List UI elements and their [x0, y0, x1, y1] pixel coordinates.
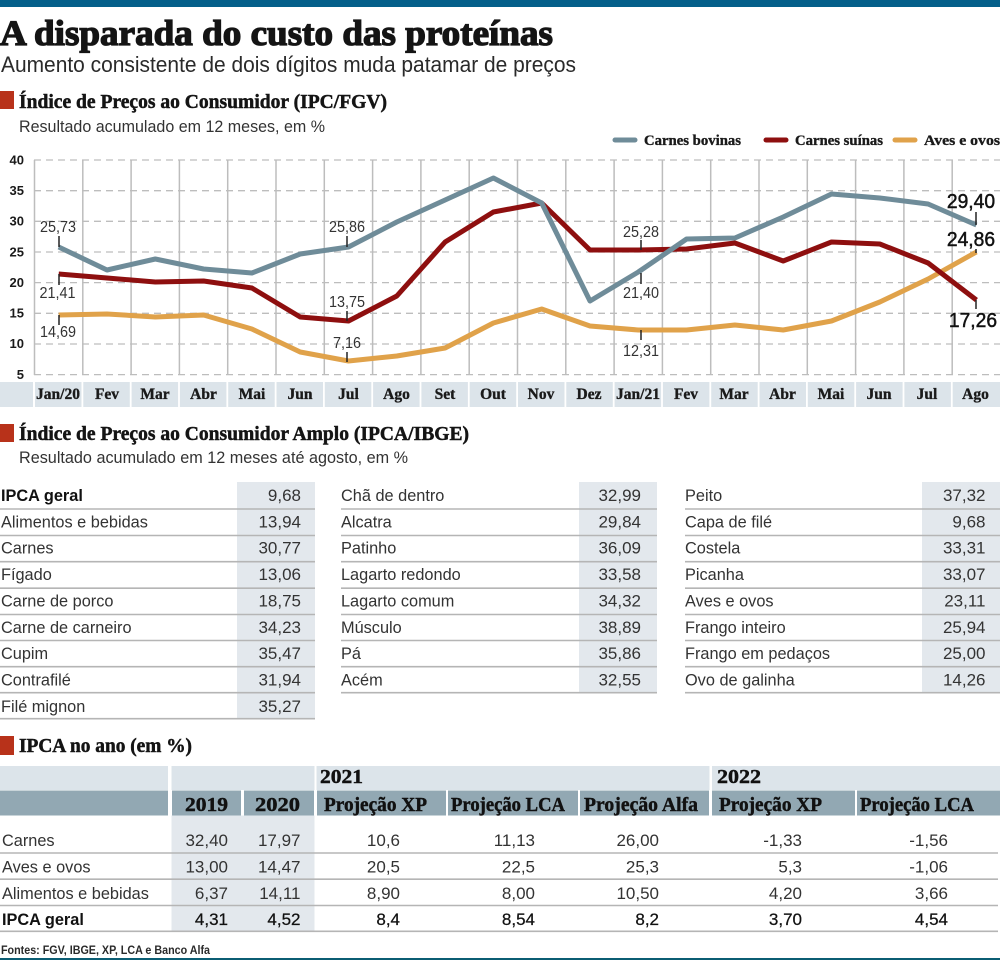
table header: 2021 [320, 766, 363, 788]
table rows: 11,13 [494, 831, 535, 850]
month axis [0, 382, 1000, 407]
table: column 1: 35,47 [258, 644, 301, 663]
legend [615, 133, 1000, 149]
table: column 1: 18,75 [258, 591, 301, 610]
table rows: 8,4 [376, 910, 400, 929]
month axis: Abr [769, 386, 796, 403]
subheading: IPC/FGV: Resultado acumulado em 12 meses, em % [19, 118, 325, 136]
month axis: Nov [528, 386, 555, 403]
series: Aves e ovos [59, 252, 976, 361]
table: column 2: 33,58 [598, 565, 641, 584]
table: column 1 [0, 482, 315, 719]
month axis: Out [480, 386, 507, 403]
table: column 3: 25,94 [943, 618, 986, 637]
month axis: Mar [140, 386, 170, 403]
month axis: Fev [95, 386, 119, 403]
table header: Projeção Alfa [584, 794, 698, 816]
data callouts: 25,73 [40, 218, 76, 236]
table: column 1: 31,94 [258, 670, 301, 690]
y axis labels: 25 [10, 244, 24, 260]
table rows: 22,5 [502, 858, 535, 876]
month axis: Jul [338, 386, 360, 403]
table header: 2022 [717, 766, 761, 788]
source note: Fontes: FGV, IBGE, XP, LCA e Banco Alfa [1, 943, 210, 957]
table rows: 3,70 [769, 910, 802, 929]
table header [0, 766, 1000, 816]
table rows: 25,3 [626, 858, 659, 876]
month axis: Jun [866, 386, 892, 403]
table: column 2 [341, 482, 657, 693]
month axis: Jan/21 [616, 386, 660, 403]
table: column 3: 33,07 [943, 565, 986, 584]
table rows: 13,00 [185, 858, 228, 876]
table: column 2: 32,99 [598, 486, 641, 505]
table: column 1: 34,23 [258, 618, 301, 637]
data callouts: 14,69 [40, 323, 76, 341]
table: column 3: Frango em pedaços [685, 644, 830, 663]
y axis labels: 5 [17, 367, 24, 382]
table header: Projeção LCA [451, 794, 565, 816]
table: column 2: 36,09 [598, 539, 641, 558]
month axis: Abr [190, 386, 217, 403]
table: column 3: Capa de filé [685, 512, 772, 531]
table rows: Carnes [2, 831, 55, 850]
y axis labels [10, 152, 24, 382]
table rows: 4,54 [915, 910, 948, 929]
table rows: 8,54 [502, 910, 535, 929]
line chart: IPC/FGV [10, 152, 1000, 382]
month axis: Ago [962, 386, 989, 403]
table: column 2: 29,84 [598, 512, 641, 531]
y axis labels: 40 [10, 152, 24, 168]
y axis labels: 15 [10, 306, 24, 320]
table rows: 6,37 [195, 884, 228, 903]
table rows: 17,97 [258, 831, 300, 850]
month axis: Fev [674, 386, 698, 403]
table: column 1: Contrafilé [1, 670, 71, 690]
table: column 1: IPCA geral [1, 486, 83, 505]
month axis: Ago [383, 386, 410, 403]
table header: Projeção XP [719, 794, 822, 816]
series: Carnes suínas [59, 203, 976, 321]
table: column 1: 13,94 [258, 512, 301, 531]
data callouts: 21,40 [623, 284, 659, 302]
data callouts: 29,40 [947, 190, 995, 213]
table: column 1: 30,77 [258, 539, 301, 558]
table header: Projeção XP [324, 794, 427, 816]
table rows: 14,47 [258, 858, 300, 876]
table: column 3: Ovo de galinha [685, 670, 795, 690]
table header: 2019 [185, 794, 228, 816]
table: column 2: Pá [341, 644, 362, 663]
table rows: -1,06 [909, 858, 948, 876]
subheading: IPCA/IBGE: Resultado acumulado em 12 meses até agosto, em % [19, 449, 408, 467]
data callouts: 7,16 [333, 334, 361, 352]
table: column 2: Músculo [341, 617, 402, 637]
table: column 3: 9,68 [952, 512, 986, 531]
table: column 3: Frango inteiro [685, 617, 786, 637]
subtitle: Aumento consistente de dois dígitos muda patamar de preços [1, 52, 576, 77]
table rows: -1,56 [909, 831, 948, 850]
table: column 3: Peito [685, 486, 722, 505]
table: column 2: 38,89 [598, 618, 641, 637]
table: column 2: 35,86 [598, 644, 641, 663]
table: column 3: 37,32 [943, 486, 986, 505]
month axis: Mai [818, 386, 845, 403]
table: column 3: Aves e ovos [685, 591, 774, 610]
table rows: 10,6 [367, 831, 400, 850]
table header: Projeção LCA [860, 794, 974, 816]
y axis labels: 10 [10, 336, 24, 351]
heading: IPCA/IBGE: Índice de Preços ao Consumidor Amplo (IPCA/IBGE) [19, 422, 469, 445]
table rows: 3,66 [915, 884, 948, 903]
table: column 1: Fígado [1, 565, 52, 584]
month axis: Mai [239, 386, 266, 403]
data callouts: 12,31 [623, 342, 659, 360]
table rows: 20,5 [367, 858, 400, 876]
series: Carnes bovinas [59, 178, 976, 301]
month axis: Jun [288, 386, 313, 403]
table: column 2: Patinho [341, 538, 396, 558]
table rows: 8,2 [635, 910, 659, 929]
y axis labels: 20 [10, 275, 24, 290]
table rows: -1,33 [763, 831, 802, 850]
month axis: Jan/20 [36, 386, 80, 403]
table: column 3: Costela [685, 538, 741, 558]
legend: Aves e ovos [924, 133, 1000, 149]
table rows: Aves e ovos [2, 857, 91, 877]
table: column 3: 23,11 [944, 591, 986, 610]
heading: IPC/FGV: Índice de Preços ao Consumidor (IPC/FGV) [19, 90, 387, 113]
table: column 1: 9,68 [268, 486, 301, 505]
y axis labels: 35 [10, 183, 24, 198]
data callouts: 25,28 [623, 223, 659, 241]
table rows: 32,40 [185, 831, 228, 850]
table: column 2: Lagarto comum [341, 591, 454, 610]
month axis: Dez [577, 386, 602, 403]
table rows: 26,00 [616, 831, 659, 850]
month axis: Jul [917, 386, 938, 403]
data callouts: 25,86 [329, 218, 365, 236]
table rows: 4,52 [267, 910, 300, 929]
table rows: 10,50 [616, 884, 659, 903]
table: column 2: 32,55 [598, 670, 641, 690]
data callouts: 17,26 [949, 309, 997, 332]
table: column 3 [685, 482, 1000, 693]
table: column 2: Acém [341, 670, 383, 690]
table: column 3: 33,31 [943, 539, 986, 558]
table rows: 4,31 [195, 910, 228, 929]
table: column 2: Chã de dentro [341, 486, 444, 505]
table: column 3: Picanha [685, 565, 745, 584]
table: column 1: Cupim [1, 644, 48, 663]
table: IPCA no ano [0, 766, 1000, 932]
legend: Carnes bovinas [644, 133, 741, 149]
heading: IPCA no ano: IPCA no ano (em %) [19, 735, 192, 757]
table rows: 4,20 [769, 884, 802, 903]
table rows: 8,00 [502, 884, 535, 903]
data callouts: 24,86 [947, 228, 995, 251]
table: column 1: Filé mignon [1, 696, 85, 716]
table: column 1: Carne de porco [1, 591, 113, 610]
table header: 2020 [255, 794, 300, 816]
table rows: 8,90 [367, 884, 400, 903]
data callouts: 21,41 [39, 284, 76, 302]
table rows: Alimentos e bebidas [2, 884, 149, 903]
table: column 3: 25,00 [943, 644, 986, 663]
data callouts: 13,75 [329, 293, 365, 311]
month axis: Mar [719, 386, 749, 403]
table rows: 14,11 [259, 884, 300, 903]
title: A disparada do custo das proteínas [0, 13, 553, 53]
table: column 1: Alimentos e bebidas [1, 512, 148, 531]
table: column 1: Carnes [1, 538, 54, 558]
table: column 1: 35,27 [258, 697, 301, 716]
table rows [2, 831, 948, 929]
table: column 2: 34,32 [598, 591, 641, 610]
table: column 1: Carne de carneiro [1, 617, 132, 637]
table rows: IPCA geral [2, 910, 84, 929]
table: column 1: 13,06 [258, 565, 301, 584]
table: column 3: 14,26 [943, 670, 986, 690]
data callouts [39, 190, 997, 362]
month axis: Set [435, 386, 456, 403]
y axis labels: 30 [10, 214, 24, 228]
table: column 2: Alcatra [341, 512, 392, 531]
table rows: 5,3 [778, 858, 802, 876]
table: column 2: Lagarto redondo [341, 565, 461, 584]
legend: Carnes suínas [795, 133, 883, 149]
